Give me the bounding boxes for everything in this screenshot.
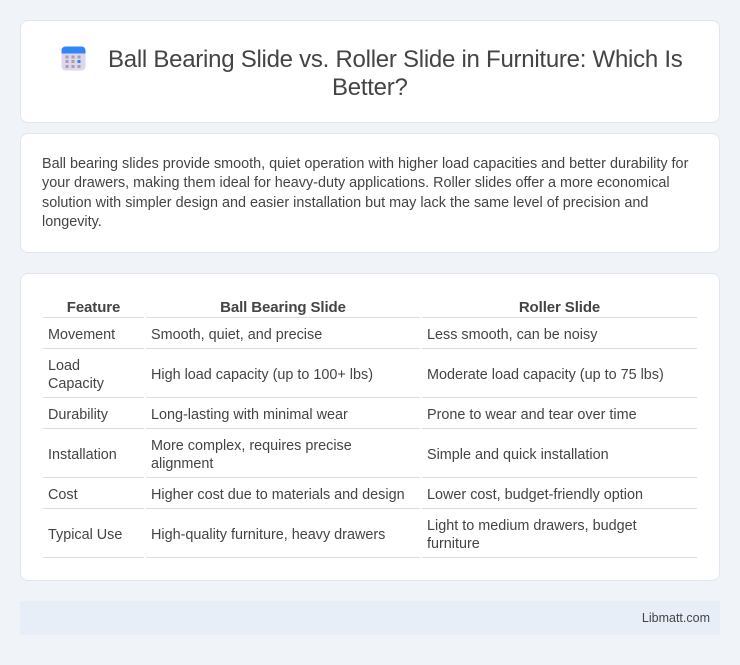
intro text <box>42 156 688 230</box>
row: load capacity: Load <box>48 358 80 374</box>
row: movement: Less smooth, can be noisy <box>427 327 597 343</box>
row: movement: Movement <box>48 327 115 343</box>
intro text: longevity. <box>42 214 102 230</box>
row: installation: alignment <box>151 456 213 472</box>
row: load capacity <box>48 358 664 392</box>
row: durability: Prone to wear and tear over time <box>427 407 637 423</box>
title <box>108 46 682 101</box>
header panel <box>20 20 720 123</box>
row: typical use: High-quality furniture, heavy drawers <box>151 527 385 543</box>
row: movement: Smooth, quiet, and precise <box>151 327 322 343</box>
table header: Roller Slide <box>519 299 600 316</box>
row: installation: More complex, requires precise <box>151 438 352 454</box>
intro text: solution with simpler design and easier installation but may lack the same level of precision and <box>42 195 648 211</box>
row: load capacity: Moderate load capacity (up to 75 lbs) <box>427 367 664 383</box>
row: cost <box>48 487 643 503</box>
row: cost: Higher cost due to materials and design <box>151 487 405 503</box>
row: typical use: furniture <box>427 536 480 552</box>
table header: Ball Bearing Slide <box>220 299 346 316</box>
row: typical use <box>48 518 637 552</box>
row: installation: Simple and quick installation <box>427 447 609 463</box>
intro text: Ball bearing slides provide smooth, quiet operation with higher load capacities and better durability for <box>42 156 688 172</box>
row: movement <box>48 327 598 343</box>
footer <box>20 601 720 635</box>
comparison table panel <box>20 273 720 581</box>
table header: Feature <box>67 299 120 316</box>
intro panel <box>20 133 720 253</box>
icon: calendar <box>62 46 86 70</box>
table header <box>67 299 600 316</box>
row: cost: Cost <box>48 487 78 503</box>
row: durability <box>48 407 637 423</box>
title: Ball Bearing Slide vs. Roller Slide in Furniture: Which Is <box>108 46 682 73</box>
row: durability: Long-lasting with minimal wear <box>151 407 348 423</box>
row: installation: Installation <box>48 447 117 463</box>
row: cost: Lower cost, budget-friendly option <box>427 487 643 503</box>
footer credit: Libmatt.com <box>642 611 710 625</box>
row: load capacity: High load capacity (up to 100+ lbs) <box>151 367 373 383</box>
intro text: your drawers, making them ideal for heavy-duty applications. Roller slides offer a more economical <box>42 175 670 191</box>
row: installation <box>48 438 609 472</box>
row: load capacity: Capacity <box>48 376 104 392</box>
row: typical use: Typical Use <box>48 527 122 543</box>
row: typical use: Light to medium drawers, budget <box>427 518 637 534</box>
title: Better? <box>332 74 408 101</box>
row: durability: Durability <box>48 407 108 423</box>
